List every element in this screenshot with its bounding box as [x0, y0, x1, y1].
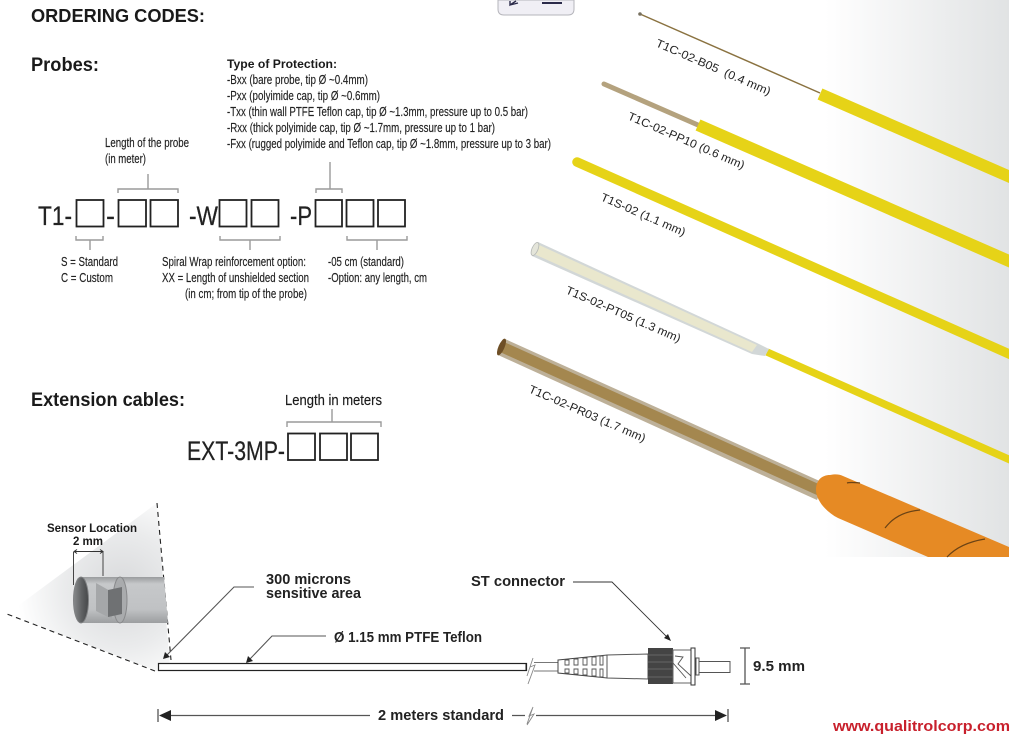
- text: length of the probe: Length of the probe: [105, 136, 189, 150]
- sensor location detail: 2 mm: [73, 536, 103, 548]
- label: PTFE teflon diameter: Ø 1.15 mm PTFE Teflon: [334, 630, 482, 646]
- probe: T1S-02-PT05: T1S-02-PT05 (1.3 mm): [564, 285, 682, 345]
- label: ST connector: [471, 574, 671, 641]
- sensor location detail: [47, 523, 168, 623]
- text: cap length option: -Option: any length, cm: [328, 271, 427, 285]
- dimension: 2 meters standard: [158, 707, 728, 725]
- extension cable code: Length in meters: [285, 392, 382, 409]
- sensor zoom cone: [7, 503, 171, 671]
- fiber probe cable: [158, 658, 558, 684]
- label: PTFE teflon diameter: [246, 630, 482, 663]
- text: standard or custom: S = Standard: [61, 255, 118, 269]
- title: ORDERING CODES:: [31, 6, 205, 26]
- label: 300 microns sensitive area: [163, 572, 362, 659]
- probe: T1S-02-PT05: [529, 241, 1025, 466]
- dimension: 9.5 mm: [740, 648, 805, 684]
- text block: type of protection: -Bxx (bare probe, tip Ø ~0.4mm): [227, 73, 368, 87]
- text: standard or custom: [61, 255, 118, 285]
- text block: type of protection: Type of Protection:: [227, 57, 337, 71]
- dimension: 9.5 mm: 9.5 mm: [753, 659, 805, 675]
- label: ST connector: ST connector: [471, 574, 565, 590]
- probe ordering code diagram: -W: [189, 201, 218, 231]
- extension cable code: [187, 392, 382, 466]
- text: spiral wrap option: Spiral Wrap reinforcement option:: [162, 255, 306, 269]
- text: spiral wrap option: [162, 255, 309, 301]
- toolbar widget: [498, 0, 574, 15]
- probe: T1C-02-B05: T1C-02-B05 (0.4 mm): [654, 38, 772, 98]
- probe ordering code diagram: -P: [290, 201, 312, 231]
- text: standard or custom: C = Custom: [61, 271, 113, 285]
- dimension: 2 meters standard: 2 meters standard: [378, 708, 504, 724]
- probe: T1S-02: T1S-02 (1.1 mm): [599, 192, 687, 239]
- text block: type of protection: -Pxx (polyimide cap, tip Ø ~0.6mm): [227, 89, 380, 103]
- probe: T1C-02-PP10: T1C-02-PP10 (0.6 mm): [626, 111, 746, 172]
- heading: extension cables: Extension cables:: [31, 390, 185, 411]
- text: length of the probe: [105, 136, 189, 166]
- text block: type of protection: [227, 57, 551, 151]
- probe: T1S-02: [577, 162, 1025, 361]
- ST connector: [558, 648, 730, 685]
- text: spiral wrap option: (in cm; from tip of the probe): [185, 287, 307, 301]
- probe: T1C-02-PR03: T1C-02-PR03 (1.7 mm): [527, 384, 647, 445]
- text block: type of protection: -Fxx (rugged polyimide and Teflon cap, tip Ø ~1.8mm, pressure up to 3 bar): [227, 137, 551, 151]
- panel: gray background behind probes: [825, 0, 1009, 557]
- text block: type of protection: -Txx (thin wall PTFE Teflon cap, tip Ø ~1.3mm, pressure up to 0.5 bar): [227, 105, 528, 119]
- extension cable code: EXT-3MP-: [187, 436, 285, 466]
- probe ordering code diagram: [38, 162, 407, 250]
- text block: type of protection: -Rxx (thick polyimide cap, tip Ø ~1.7mm, pressure up to 1 bar): [227, 121, 495, 135]
- heading: probes: Probes:: [31, 55, 99, 76]
- probe: T1C-02-B05: [638, 12, 1025, 184]
- text: spiral wrap option: XX = Length of unshielded section: [162, 271, 309, 285]
- text: cap length option: -05 cm (standard): [328, 255, 404, 269]
- website url: www.qualitrolcorp.com: [832, 718, 1010, 735]
- probe ordering code diagram: -: [106, 201, 115, 231]
- label: 300 microns sensitive area: sensitive area: [266, 586, 362, 602]
- text: cap length option: [328, 255, 427, 285]
- probe ordering code diagram: T1-: [38, 201, 72, 231]
- label: 300 microns sensitive area: 300 microns: [266, 572, 351, 588]
- probe: T1C-02-PP10: [604, 84, 1025, 268]
- text: length of the probe: (in meter): [105, 152, 146, 166]
- sensor location detail: Sensor Location: [47, 523, 137, 535]
- probe: T1C-02-PR03: [495, 338, 1009, 557]
